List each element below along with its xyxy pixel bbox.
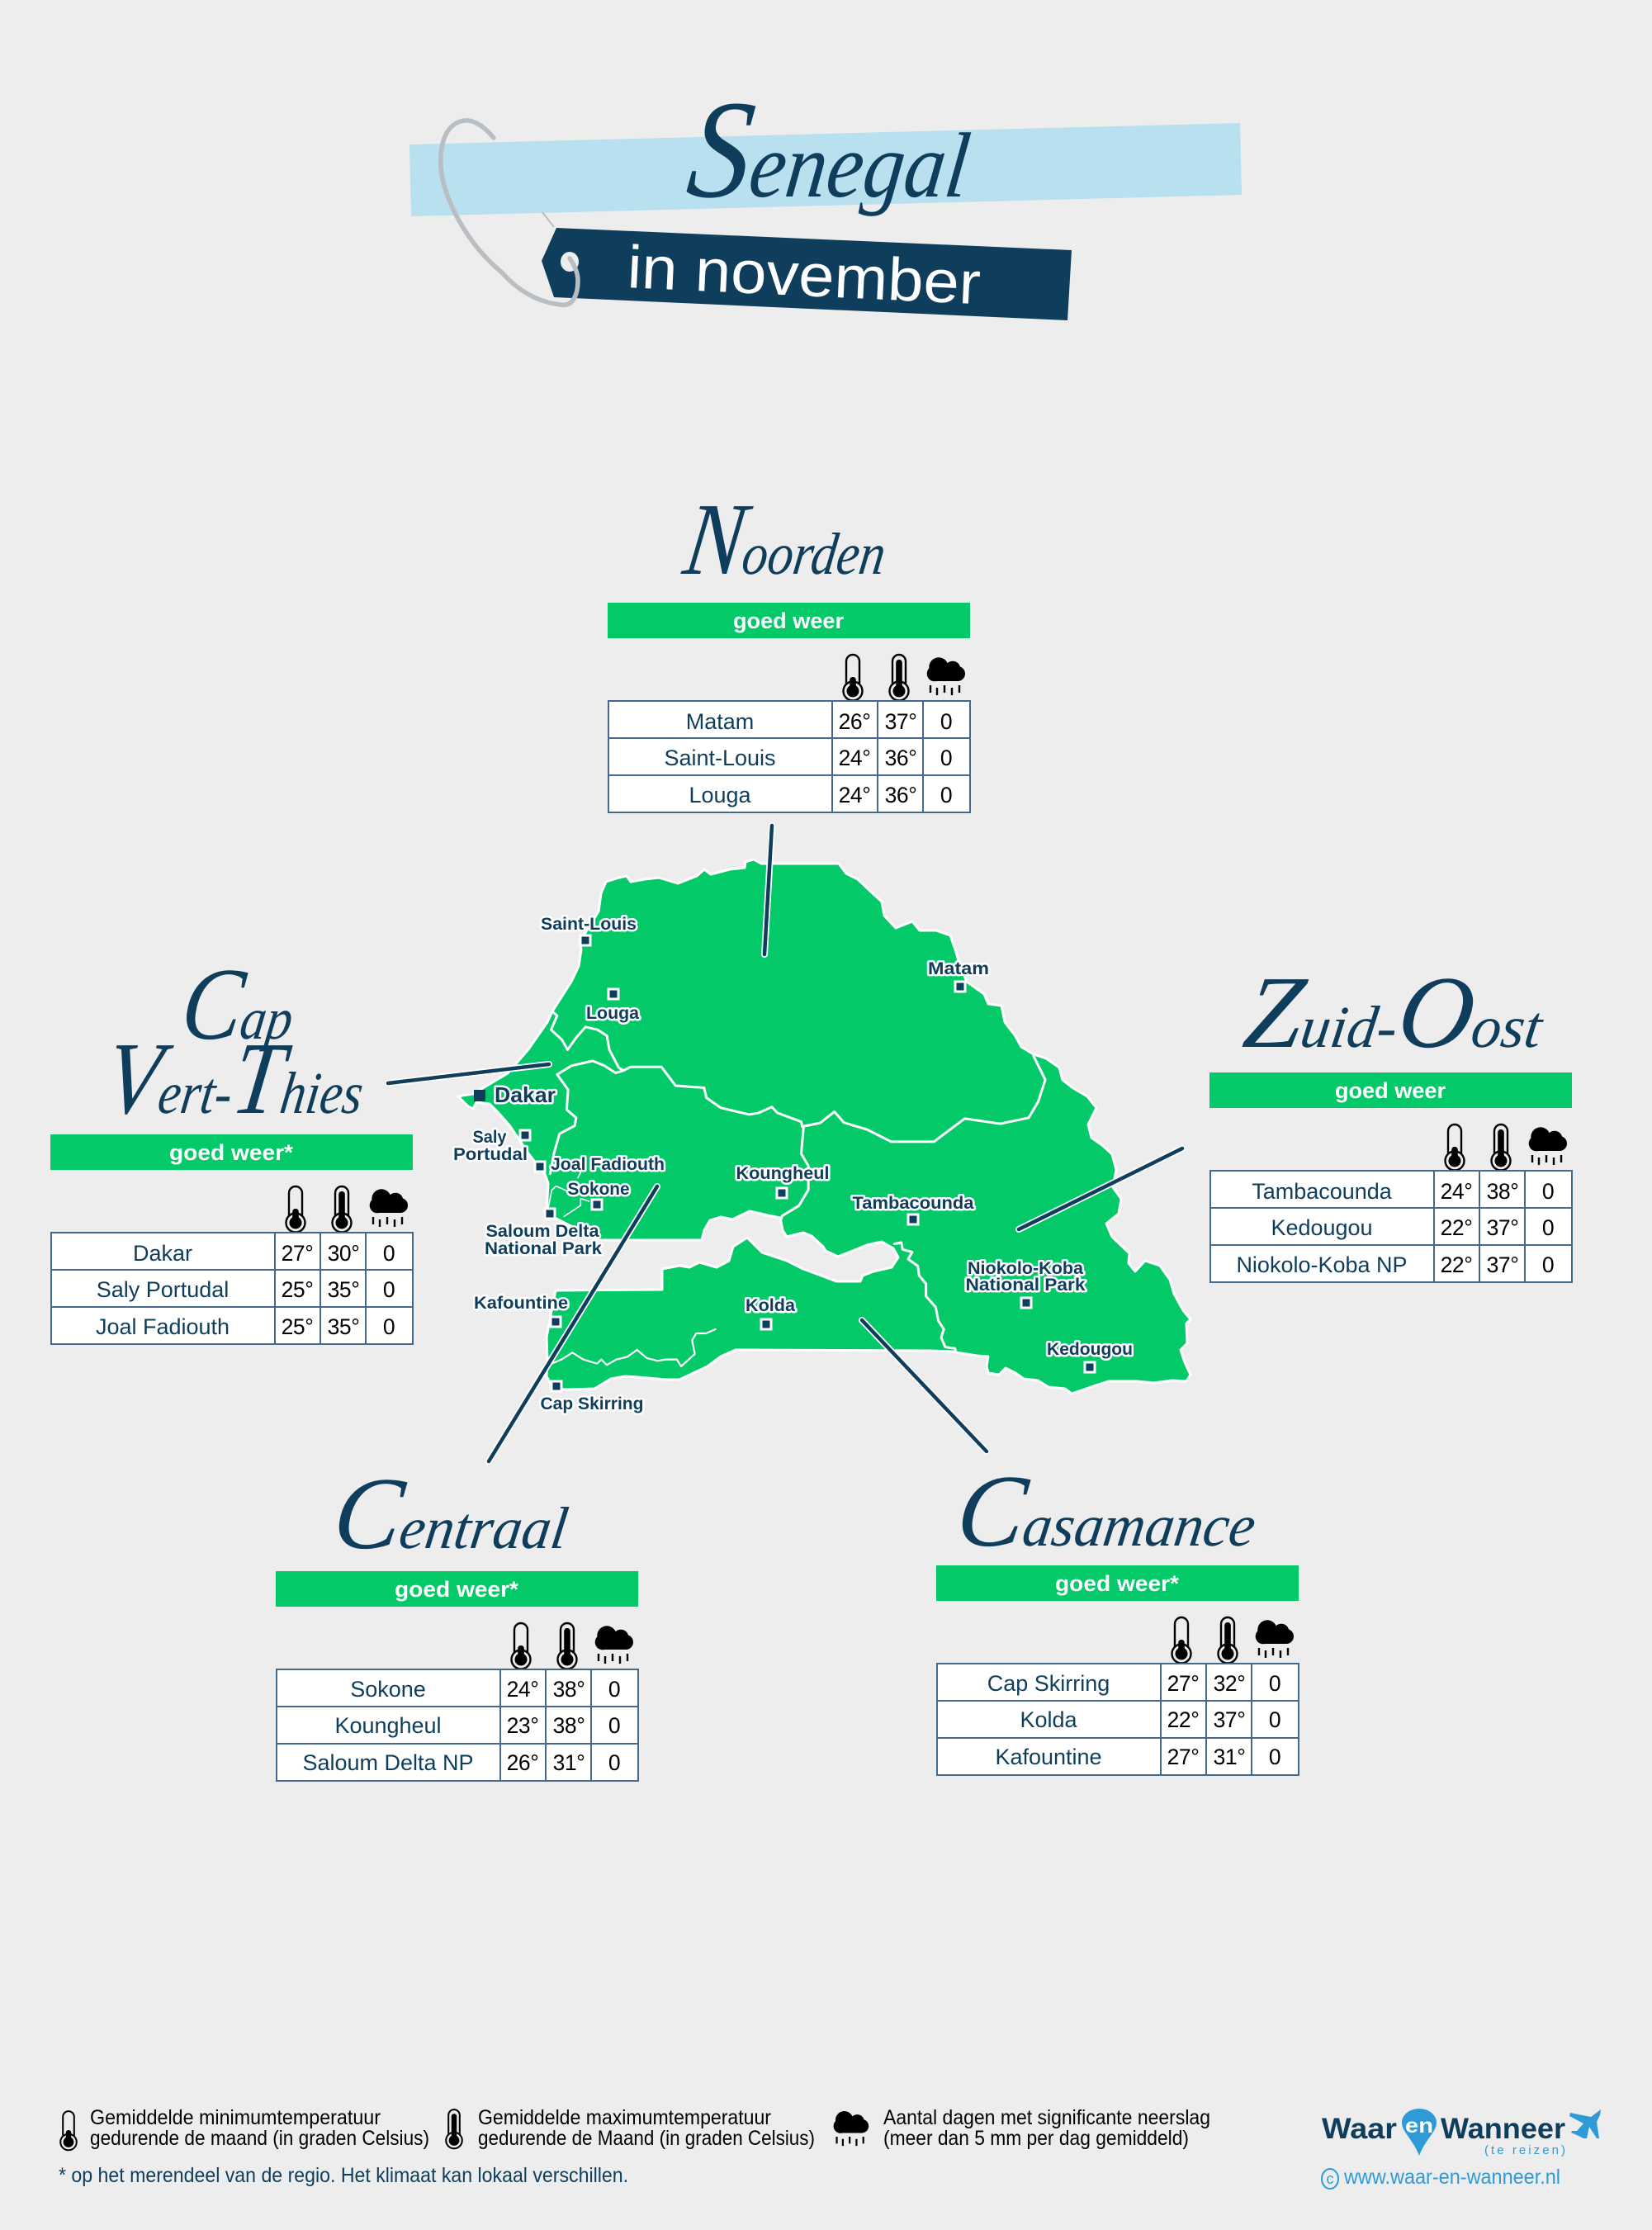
city: Koungheul: Koungheul <box>736 1164 829 1183</box>
weather bar <box>1209 1072 1572 1108</box>
icons <box>286 1186 408 1232</box>
city: Kedougou: Kedougou <box>1047 1340 1133 1359</box>
legend: maximum temperature <box>446 2106 815 2150</box>
city: Tambacounda <box>852 1194 974 1224</box>
table: 26° <box>839 709 870 734</box>
table: 25° <box>282 1314 313 1339</box>
table: 27° <box>1167 1671 1199 1696</box>
table: 22° <box>1441 1215 1472 1240</box>
city: Kafountine: Kafountine <box>474 1294 568 1313</box>
table: 24° <box>507 1677 538 1702</box>
city: Tambacounda: Tambacounda <box>852 1194 974 1213</box>
legend <box>59 2106 1210 2187</box>
weather bar <box>608 603 970 638</box>
table: 0 <box>383 1314 395 1339</box>
table: 37° <box>885 709 916 734</box>
heading: Centraal: Centraal <box>327 1457 578 1571</box>
legend: minimum temperature: gedurende de maand (in graden Celsius) <box>90 2127 429 2150</box>
table: 27° <box>282 1241 313 1266</box>
table: 0 <box>1542 1215 1554 1240</box>
table: Kafountine <box>995 1745 1102 1769</box>
table: Niokolo-Koba NP <box>1236 1252 1408 1277</box>
table: 0 <box>1269 1707 1280 1732</box>
city: Niokolo-Koba National Park <box>966 1259 1086 1308</box>
table: Saloum Delta NP <box>302 1750 474 1775</box>
panel: Zuid-Oost <box>1209 956 1572 1282</box>
table: Saly Portudal <box>97 1277 229 1302</box>
table: 31° <box>1214 1745 1245 1769</box>
city: Saloum Delta National Park <box>485 1209 602 1258</box>
table: Joal Fadiouth <box>96 1314 230 1339</box>
tag hole <box>561 252 579 272</box>
table: 37° <box>1487 1252 1518 1277</box>
weather bar: goed weer* <box>1055 1571 1180 1596</box>
table: 0 <box>608 1750 620 1775</box>
table <box>608 701 970 812</box>
city: Cap Skirring <box>540 1381 644 1413</box>
panel: Noorden <box>608 483 970 812</box>
copyright and url: c <box>1326 2171 1334 2187</box>
table: 0 <box>608 1677 620 1702</box>
weather bar <box>936 1565 1299 1601</box>
table: 38° <box>553 1713 585 1738</box>
city: Kolda: Kolda <box>746 1296 795 1315</box>
table: 0 <box>1269 1671 1280 1696</box>
table <box>277 1669 638 1781</box>
legend: precipitation: Aantal dagen met significante neerslag <box>883 2106 1210 2129</box>
icon: plane <box>1569 2109 1601 2138</box>
city: Kafountine <box>474 1294 568 1327</box>
table <box>51 1233 413 1344</box>
tag cord <box>542 212 554 227</box>
city: Louga: Louga <box>586 1004 639 1023</box>
heading: Cap Vert-Thies: Vert-Thies <box>99 1022 373 1136</box>
table: 22° <box>1441 1252 1472 1277</box>
logo <box>1322 2109 1601 2189</box>
icons <box>844 655 965 700</box>
logo word: Waar: Waar <box>1322 2113 1397 2145</box>
footnote: * op het merendeel van de regio. Het klimaat kan lokaal verschillen. <box>59 2164 628 2187</box>
table: Kolda <box>1020 1707 1078 1732</box>
city: Matam <box>928 959 989 992</box>
table <box>1210 1171 1572 1282</box>
panel: Casamance <box>936 1455 1299 1775</box>
table: 26° <box>507 1750 538 1775</box>
panel: Centraal <box>276 1457 638 1781</box>
city: Kolda <box>746 1296 795 1329</box>
table: 22° <box>1167 1707 1199 1732</box>
weather bar: goed weer* <box>395 1577 519 1602</box>
main title: Senegal <box>680 72 981 227</box>
heading: Cap Vert-Thies <box>99 948 373 1136</box>
table: 25° <box>282 1277 313 1302</box>
table: 24° <box>1441 1179 1472 1204</box>
city: Joal Fadiouth: Joal Fadiouth <box>551 1155 665 1174</box>
panel: Cap Vert-Thies <box>50 948 413 1344</box>
region borders <box>550 1011 1045 1219</box>
heading: Casamance: Casamance <box>950 1455 1266 1569</box>
title band <box>409 123 1242 216</box>
map outline <box>458 859 1190 1394</box>
icons <box>1445 1124 1567 1171</box>
weather bar: goed weer <box>1335 1078 1446 1103</box>
city: Koungheul <box>736 1164 829 1198</box>
table: Sokone <box>350 1677 426 1702</box>
city: Saly Portudal: Saly <box>472 1128 507 1147</box>
legend: maximum temperature: Gemiddelde maximumtemperatuur <box>478 2106 771 2129</box>
table: Koungheul <box>334 1713 442 1738</box>
city: Saint-Louis <box>541 915 637 945</box>
city: Saint-Louis: Saint-Louis <box>541 915 637 934</box>
line: Zuid-Oost <box>1019 1148 1182 1229</box>
table: 24° <box>839 746 870 770</box>
city: Saloum Delta National Park: National Park <box>485 1239 602 1258</box>
icons <box>1172 1617 1294 1663</box>
table: 23° <box>507 1713 538 1738</box>
copyright and url: www.waar-en-wanneer.nl <box>1343 2166 1560 2189</box>
city: Saly Portudal <box>453 1128 530 1164</box>
table: Saint-Louis <box>664 746 776 770</box>
city: Saly Portudal: Portudal <box>453 1145 528 1164</box>
string <box>441 121 578 305</box>
logo word: Wanneer: Wanneer <box>1441 2113 1565 2145</box>
table: 0 <box>1542 1179 1554 1204</box>
subtitle: in november <box>626 234 982 317</box>
south-east border <box>894 1243 956 1352</box>
table: 36° <box>885 783 916 807</box>
line: Centraal <box>489 1186 657 1461</box>
table: 0 <box>1542 1252 1554 1277</box>
city: Niokolo-Koba National Park: National Park <box>966 1276 1086 1295</box>
table: Tambacounda <box>1252 1179 1393 1204</box>
table: Kedougou <box>1271 1215 1373 1240</box>
table: 35° <box>328 1314 359 1339</box>
city: Louga <box>586 989 639 1023</box>
icons <box>512 1623 633 1669</box>
table: 37° <box>1487 1215 1518 1240</box>
line: Noorden <box>764 826 772 954</box>
city: Sokone <box>568 1180 629 1210</box>
logo tagline: (te reizen) <box>1484 2143 1565 2157</box>
table: 0 <box>608 1713 620 1738</box>
legend: precipitation: (meer dan 5 mm per dag gemiddeld) <box>883 2127 1189 2150</box>
table: Matam <box>686 709 754 734</box>
table: 31° <box>553 1750 585 1775</box>
table: 36° <box>885 746 916 770</box>
table: 0 <box>1269 1745 1280 1769</box>
legend: minimum temperature <box>60 2106 429 2150</box>
city: Kedougou <box>1047 1340 1133 1372</box>
leader lines <box>388 826 1182 1461</box>
table: 35° <box>328 1277 359 1302</box>
table: Louga <box>689 783 752 807</box>
legend: maximum temperature: gedurende de Maand (in graden Celsius) <box>478 2127 815 2150</box>
weather bar: goed weer* <box>169 1140 294 1165</box>
table: 0 <box>383 1277 395 1302</box>
logo pin: en <box>1405 2114 1433 2138</box>
weather bar <box>50 1134 413 1170</box>
table: 38° <box>553 1677 585 1702</box>
table: 24° <box>839 783 870 807</box>
table: 0 <box>940 746 952 770</box>
weather bar <box>276 1571 638 1607</box>
map city labels <box>453 915 1133 1413</box>
table: 37° <box>1214 1707 1245 1732</box>
heading: Noorden: Noorden <box>677 483 896 597</box>
weather bar: goed weer <box>733 608 844 633</box>
table: 0 <box>940 783 952 807</box>
table: 27° <box>1167 1745 1199 1769</box>
tag shape <box>542 228 1072 320</box>
line: Casamance <box>862 1320 987 1451</box>
city: Cap Skirring: Cap Skirring <box>540 1394 644 1413</box>
heading: Zuid-Oost: Zuid-Oost <box>1238 956 1553 1070</box>
legend: precipitation <box>834 2106 1210 2150</box>
table: 0 <box>940 709 952 734</box>
title block <box>409 72 1242 320</box>
table <box>937 1664 1299 1775</box>
rivers <box>548 1172 716 1366</box>
table: 0 <box>383 1241 395 1266</box>
table: Dakar <box>133 1241 192 1266</box>
legend: minimum temperature: Gemiddelde minimumtemperatuur <box>90 2106 381 2129</box>
city: Dakar: Dakar <box>495 1082 556 1107</box>
table: 32° <box>1214 1671 1245 1696</box>
city: Saloum Delta National Park: Saloum Delta <box>485 1222 599 1241</box>
heading: Cap Vert-Thies: Cap <box>175 948 303 1062</box>
city: Matam: Matam <box>928 959 989 978</box>
city: Sokone: Sokone <box>568 1180 629 1199</box>
map of Senegal <box>458 859 1190 1394</box>
logo pin <box>1402 2109 1437 2156</box>
table: Cap Skirring <box>987 1671 1110 1696</box>
table: 30° <box>328 1241 359 1266</box>
line: Cap Vert-Thies <box>388 1064 549 1083</box>
city: Niokolo-Koba National Park: Niokolo-Koba <box>968 1259 1083 1278</box>
table: 38° <box>1487 1179 1518 1204</box>
